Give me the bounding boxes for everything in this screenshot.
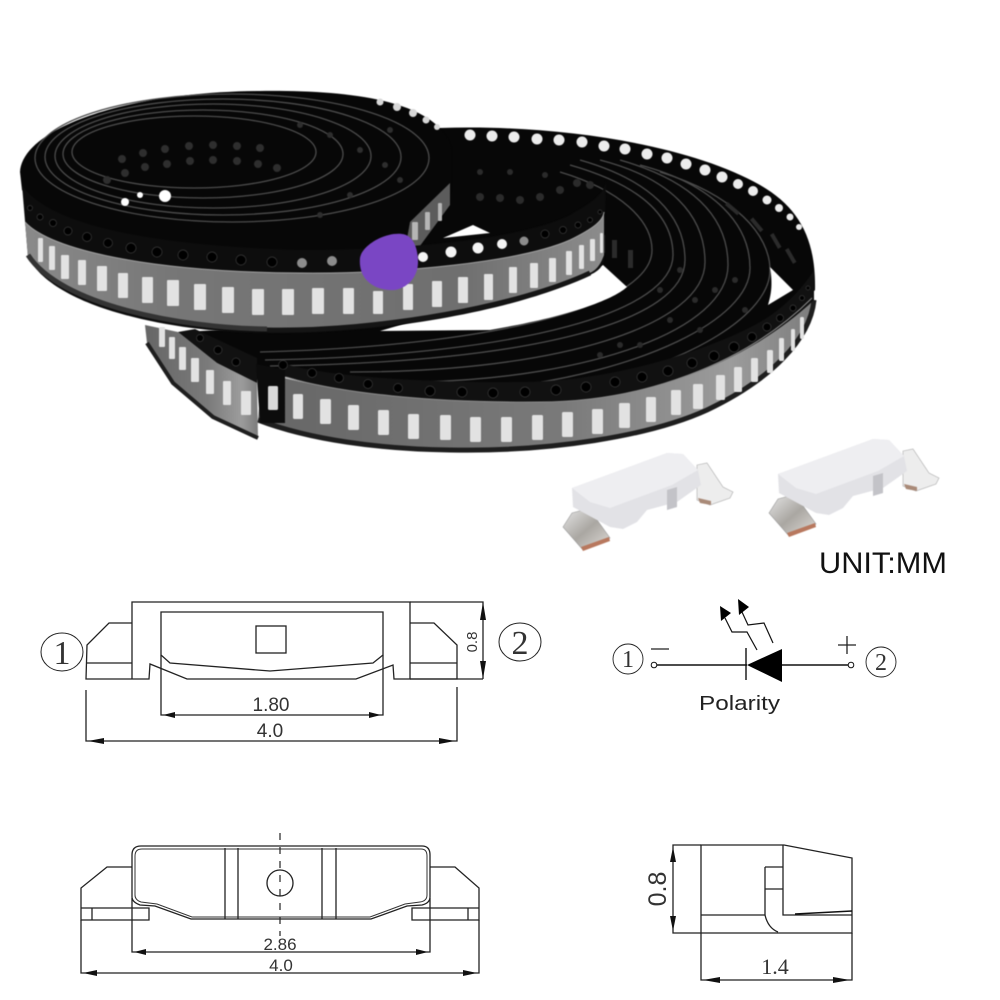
coil 2 dark perforations [278, 286, 810, 398]
pin 1 marker [41, 633, 83, 672]
coil 1 dim marks and holes [103, 122, 403, 218]
photo: loose SMD LED, right [769, 439, 939, 537]
pin 2 marker [499, 623, 541, 662]
width dimension 4.0 [81, 920, 479, 976]
left and right terminal tabs [86, 623, 132, 679]
coil 2 LEDs [293, 317, 804, 442]
white gaps between windings [380, 265, 627, 331]
photo: loose SMD LED, left [563, 453, 733, 551]
coil 2 loose tape end [145, 325, 258, 438]
width dimension 1.4 [701, 933, 852, 983]
polarity caption: Polarity [699, 693, 780, 715]
width dimension 4.0: 4.0 [257, 721, 283, 742]
width dimension 1.80: 1.80 [253, 695, 289, 716]
package outline [132, 846, 430, 919]
plus sign [838, 636, 856, 654]
package outline [132, 602, 410, 679]
height dimension 0.8 [644, 845, 701, 933]
pin 1 label [613, 644, 643, 674]
pin 2 label [866, 647, 896, 677]
drawing: bottom view with dimensions [81, 833, 479, 976]
unit label: UNIT:MM [819, 547, 947, 580]
photo: reel of LED tape, upper coil [20, 91, 606, 333]
coil 1 inner gray band [405, 183, 450, 250]
height dimension 0.8: 0.8 [464, 632, 481, 652]
package outline [701, 845, 852, 933]
coil 2 white sprocket holes along top arc [464, 130, 802, 230]
coil 1 front tape band [22, 180, 606, 333]
width dimension 2.86 [132, 898, 430, 955]
width dimension 4.0 [86, 687, 457, 744]
center mark [267, 833, 293, 936]
drawing: side view with dimensions [644, 845, 852, 983]
coil 2 black interior [183, 128, 815, 400]
height dimension 0.8 [410, 602, 486, 679]
coil 1 black interior [20, 91, 452, 256]
pin 1 marker: 1 [54, 635, 70, 672]
coil 1 perforations [28, 206, 602, 267]
purple marker sticker [360, 234, 418, 290]
minus sign [651, 648, 669, 650]
terminal tabs [81, 867, 149, 920]
coil 2 dim sprocket and LED marks [476, 169, 796, 358]
width dimension 1.4: 1.4 [761, 954, 789, 979]
width dimension 2.86: 2.86 [263, 935, 297, 954]
photo: reel of LED tape, lower coil [145, 128, 815, 450]
width dimension 4.0: 4.0 [269, 956, 293, 975]
pin 2 marker: 2 [512, 625, 528, 662]
pin 1 label: 1 [622, 647, 634, 673]
coil 1 LEDs [38, 233, 603, 315]
coil 2 main band [258, 298, 814, 450]
coil 2 tape flap [256, 364, 285, 423]
emitted light arrows [720, 599, 773, 650]
polarity schematic [613, 599, 896, 715]
pin 2 label: 2 [875, 650, 887, 676]
diode symbol [651, 648, 854, 682]
width dimension 1.80 [161, 655, 383, 718]
height dimension 0.8: 0.8 [644, 872, 672, 906]
drawing: top view with pin numbers and dimensions [41, 602, 541, 744]
